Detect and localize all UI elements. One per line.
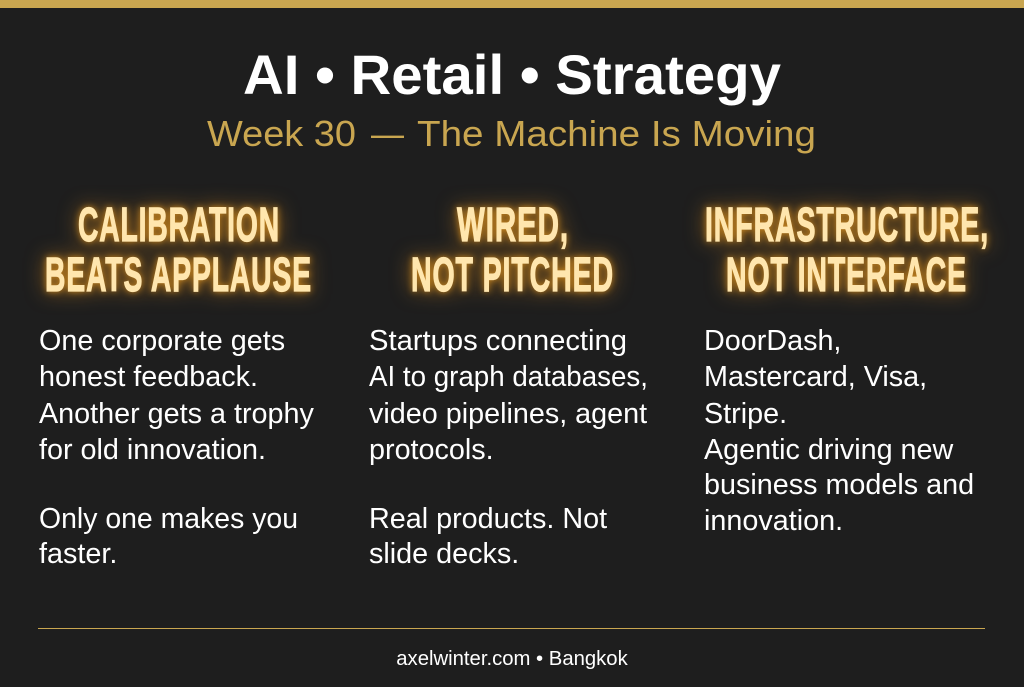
subtitle: — (371, 113, 404, 154)
footer text: axelwinter.com • Bangkok (396, 648, 629, 670)
heading: calibration beats applause: CALIBRATION (78, 199, 280, 252)
body text: calibration: for old innovation. (39, 434, 266, 466)
heading: infrastructure, not interface (705, 199, 989, 302)
body text: wired: protocols. (369, 434, 494, 466)
body text: infrastructure: innovation. (704, 505, 843, 537)
body text: infrastructure: Stripe. (704, 398, 787, 430)
subtitle (207, 113, 816, 154)
heading: calibration beats applause (45, 199, 312, 302)
body text: infrastructure: Mastercard, Visa, (704, 361, 927, 393)
body text: wired: AI to graph databases, (369, 361, 648, 393)
body text: calibration: Another gets a trophy (39, 398, 315, 430)
subtitle: Week 30 (207, 113, 356, 154)
body text: calibration: faster. (39, 538, 117, 570)
body text: calibration: One corporate gets (39, 325, 285, 357)
body text: wired: Startups connecting (369, 325, 627, 357)
title: AI • Retail • Strategy (243, 43, 781, 106)
heading: wired, not pitched (411, 199, 614, 302)
body text: infrastructure: Agentic driving new (704, 434, 954, 466)
body text: calibration: honest feedback. (39, 361, 258, 393)
heading: wired, not pitched: WIRED, (457, 199, 569, 252)
body text: calibration (39, 325, 315, 570)
panel: infrastructure, not interface (704, 199, 989, 537)
heading: wired, not pitched: NOT PITCHED (411, 249, 614, 302)
body text: infrastructure (704, 325, 974, 537)
body text: infrastructure: business models and (704, 469, 974, 501)
panel: calibration beats applause (39, 199, 315, 570)
subtitle: The Machine Is Moving (417, 113, 816, 154)
body text: wired: Real products. Not (369, 503, 607, 535)
top accent bar (0, 0, 1024, 8)
panel: wired, not pitched (369, 199, 648, 570)
heading: calibration beats applause: BEATS APPLAUSE (45, 249, 312, 302)
footer divider (38, 628, 985, 629)
body text: calibration: Only one makes you (39, 503, 298, 535)
body text: wired: video pipelines, agent (369, 398, 647, 430)
body text: wired: slide decks. (369, 538, 519, 570)
body text: wired (369, 325, 648, 570)
body text: infrastructure: DoorDash, (704, 325, 841, 357)
